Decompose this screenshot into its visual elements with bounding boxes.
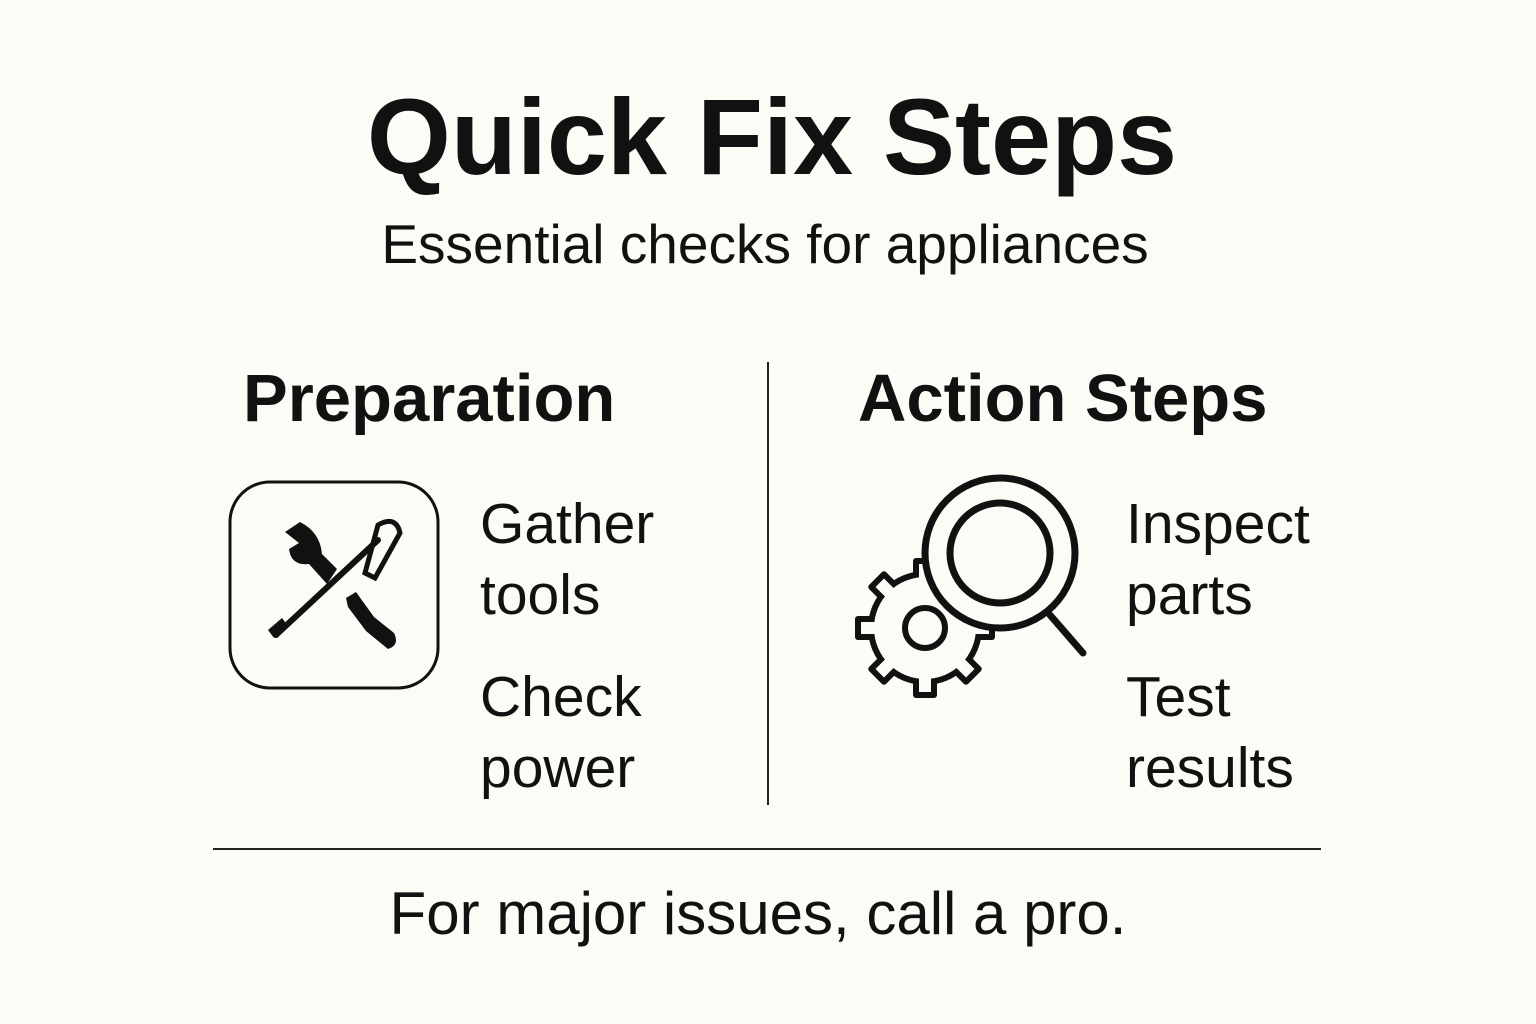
footer note: For major issues, call a pro. bbox=[390, 880, 1126, 947]
heading: preparation: Preparation bbox=[243, 361, 615, 436]
text: action items: Inspect bbox=[1126, 492, 1310, 556]
icon: tools bbox=[228, 480, 440, 690]
text: action items: parts Test bbox=[1126, 563, 1253, 729]
heading: action steps: Action Steps bbox=[858, 361, 1268, 436]
text: action items bbox=[1126, 492, 1310, 800]
title: Quick Fix Steps bbox=[367, 76, 1177, 197]
text: preparation items bbox=[480, 492, 654, 800]
text: preparation items: Gather bbox=[480, 492, 654, 556]
text: preparation items: power bbox=[480, 736, 635, 800]
icon: gear and magnifier bbox=[855, 474, 1086, 698]
divider vertical bbox=[767, 362, 769, 805]
subtitle: Essential checks for appliances bbox=[381, 213, 1149, 275]
text: preparation items: tools Check bbox=[480, 563, 642, 729]
divider horizontal bbox=[213, 848, 1321, 850]
text: action items: results bbox=[1126, 736, 1294, 800]
